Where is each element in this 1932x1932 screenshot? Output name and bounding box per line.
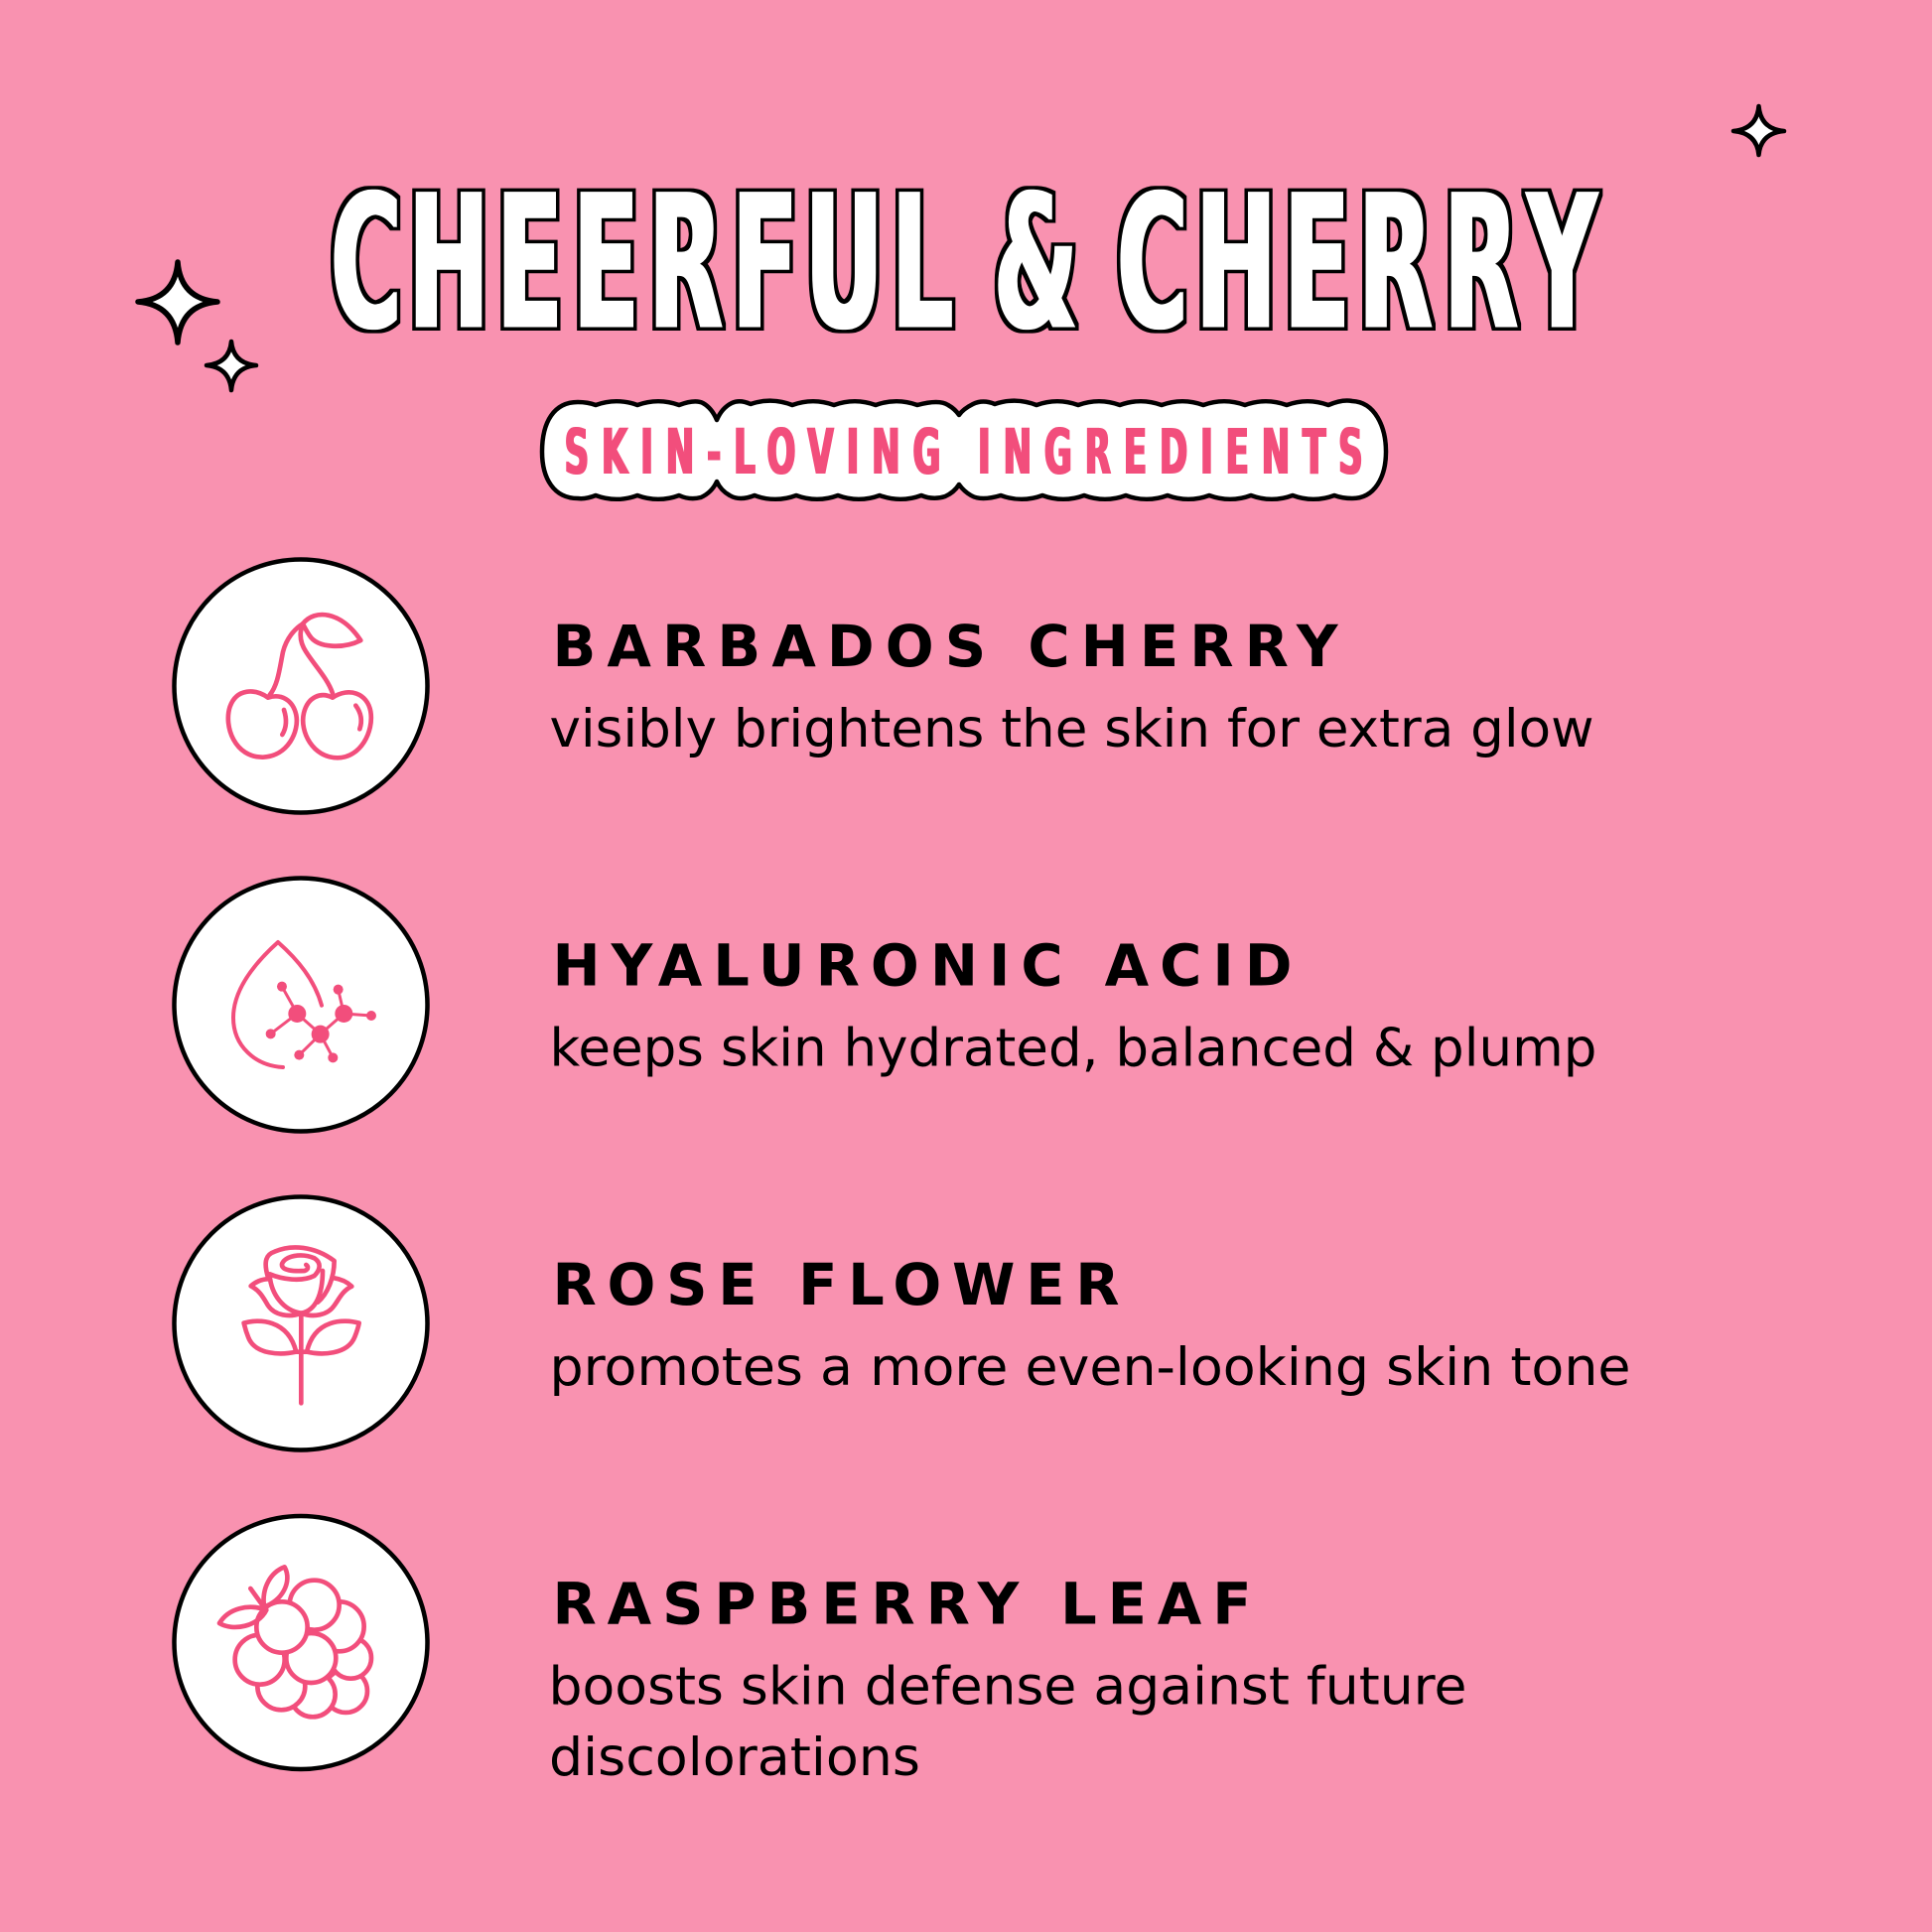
panel: Barbados cherry <box>175 560 1594 812</box>
panel: Hyaluronic acid <box>175 878 1596 1132</box>
description: Raspberry leaf <box>548 1656 1467 1788</box>
description: Raspberry leaf: boosts skin defense against future <box>548 1656 1467 1718</box>
description: Barbados cherry: visibly brightens the skin for extra glow <box>550 699 1594 759</box>
description: Raspberry leaf: discolorations <box>549 1727 920 1788</box>
icon: raspberry <box>175 1516 427 1769</box>
heading: Hyaluronic acid: HYALURONIC ACID <box>552 933 1293 999</box>
icon: top-right sparkle <box>1733 106 1784 155</box>
icon: rose <box>175 1197 427 1449</box>
description: Rose flower: promotes a more even-looking skin tone <box>550 1337 1630 1398</box>
icon: cherry <box>175 560 427 812</box>
panel: Rose flower <box>175 1197 1630 1449</box>
subtitle badge <box>542 401 1386 499</box>
icon: droplet and molecule <box>175 878 427 1132</box>
icon: large sparkle <box>138 262 217 343</box>
badge: subtitle text: SKIN-LOVING INGREDIENTS <box>565 416 1363 488</box>
panel: Raspberry leaf <box>175 1516 1467 1788</box>
title: CHEERFUL & CHERRY <box>331 157 1598 372</box>
heading: Barbados cherry: BARBADOS CHERRY <box>552 614 1339 680</box>
badge: cloud outline <box>542 401 1386 499</box>
heading: Rose flower: ROSE FLOWER <box>552 1252 1120 1318</box>
description: Hyaluronic acid: keeps skin hydrated, balanced & plump <box>550 1019 1596 1078</box>
heading: Raspberry leaf: RASPBERRY LEAF <box>552 1571 1251 1638</box>
icon: small sparkle <box>207 342 256 390</box>
